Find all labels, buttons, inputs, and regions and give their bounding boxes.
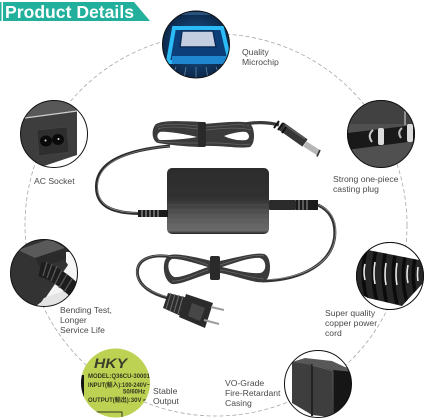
lower cable strap: [210, 256, 220, 280]
detail circle: rating label: [81, 348, 151, 420]
right strain relief: [269, 200, 318, 210]
label: VO-Grade Fire-Retardant Casing: Casing: [225, 398, 252, 408]
label: Stable Output: Stable: [153, 386, 178, 396]
upper cable bundle: [153, 121, 279, 148]
label: Quality Microchip: Microchip: [242, 57, 279, 67]
adapter body: [167, 168, 269, 234]
detail circle: copper power cord coil: [356, 242, 424, 312]
AC wall plug: [163, 293, 224, 328]
label: VO-Grade Fire-Retardant Casing: Fire-Retardant: [225, 388, 281, 398]
label: VO-Grade Fire-Retardant Casing: VO-Grade: [225, 378, 264, 388]
label: Super quality copper power cord: cord: [325, 328, 342, 338]
detail circle: bending test: [10, 239, 80, 310]
detail circle: rating label: OUTPUT(輸出):30V ⎓: [88, 396, 148, 404]
detail circle: rating label: INPUT(輸入):100-240V~: [88, 381, 150, 389]
lower cord to plug: [137, 255, 172, 298]
label: Stable Output: Output: [153, 396, 179, 406]
detail circle: fire-retardant casing: [284, 350, 354, 420]
label: Strong one-piece casting plug: casting plug: [333, 184, 379, 194]
product photo: power adapter: [96, 121, 336, 328]
detail circle: rating label: MODEL:Q36CU-30001: [88, 374, 151, 380]
lower cable bundle: [164, 254, 270, 284]
lower cord to bundle: [262, 205, 336, 281]
title banner: Product Details: Product Details: [5, 2, 134, 22]
label: Strong one-piece casting plug: Strong one-piece: [333, 174, 399, 184]
label: Bending Test, Longer Service Life: Bending Test,: [60, 305, 112, 315]
upper cable strap: [198, 122, 206, 147]
upper cord to adapter: [96, 146, 170, 214]
label: Bending Test, Longer Service Life: Service Life: [60, 325, 105, 335]
detail circle: one-piece casting plug: [347, 100, 415, 168]
label: Bending Test, Longer Service Life: Longer: [60, 315, 87, 325]
label: AC Socket: AC Socket: [34, 176, 75, 186]
detail circle: quality microchip: [162, 11, 230, 79]
DC barrel connector: [274, 121, 320, 156]
label: Super quality copper power cord: copper power: [325, 318, 377, 328]
label: Super quality copper power cord: Super quality: [325, 308, 376, 318]
left strain relief: [138, 210, 168, 217]
detail circle: AC socket: [20, 100, 88, 168]
label: Quality Microchip: Quality: [242, 47, 269, 57]
detail circle: rating label: 50/60Hz: [123, 390, 145, 396]
detail circle: rating label: HKY: [94, 355, 129, 371]
